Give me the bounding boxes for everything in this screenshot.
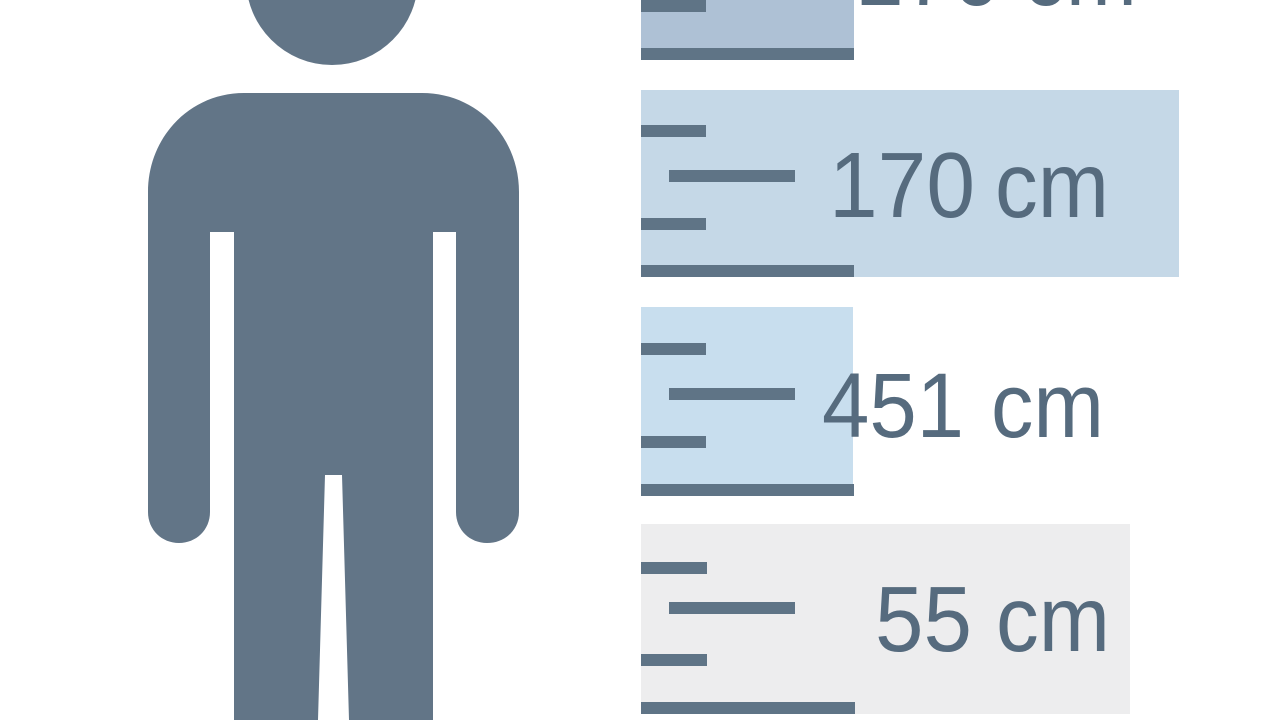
panel: 55 cm measurement (641, 524, 1130, 714)
panel: top measurement 170 cm cropped (641, 0, 1137, 60)
panel: 55 cm measurement: 55 (875, 567, 972, 671)
panel: 451 cm measurement: 451 (822, 355, 964, 457)
panel: 170 cm measurement: cm (995, 133, 1109, 237)
icon: person figure (148, 0, 519, 720)
panel: 170 cm measurement: 170 (829, 133, 975, 237)
panel: 451 cm measurement (641, 307, 1104, 496)
panel: 55 cm measurement: cm (996, 567, 1110, 671)
panel: 170 cm measurement (641, 90, 1179, 277)
panel: 451 cm measurement: cm (991, 355, 1104, 457)
